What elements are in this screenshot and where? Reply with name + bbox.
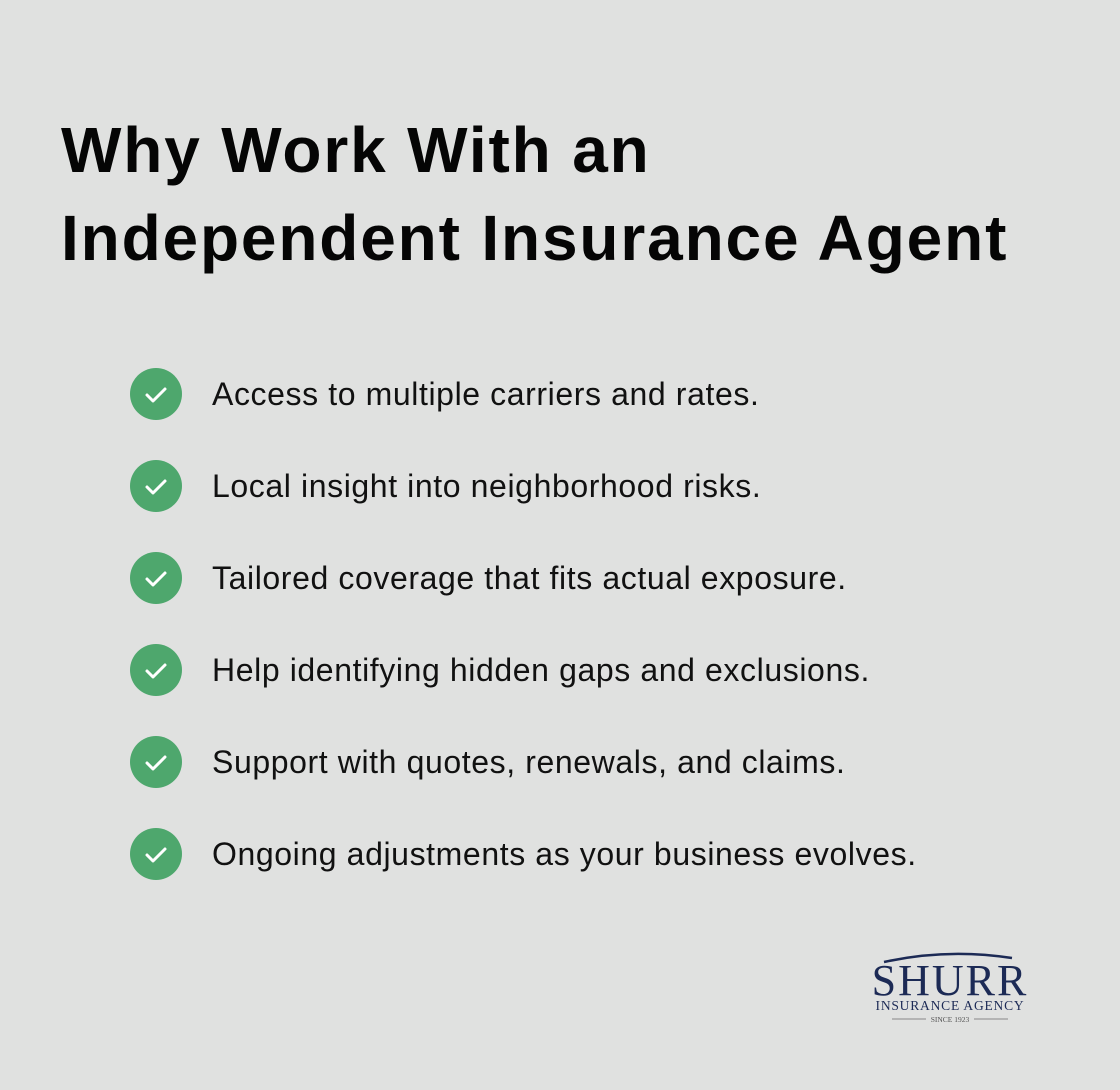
logo: SHURR bbox=[872, 956, 1028, 1005]
list item 1 bbox=[130, 368, 759, 420]
list item 5: Support with quotes, renewals, and claims. bbox=[212, 744, 846, 780]
list item 2 bbox=[130, 460, 761, 512]
list item 1: Access to multiple carriers and rates. bbox=[212, 376, 759, 412]
logo bbox=[872, 952, 1028, 1024]
list item 4: Help identifying hidden gaps and exclusions. bbox=[212, 652, 870, 688]
logo: INSURANCE AGENCY bbox=[876, 998, 1024, 1013]
list item 6 bbox=[130, 828, 917, 880]
list item 4 bbox=[130, 644, 870, 696]
title: Why Work With an bbox=[61, 114, 651, 186]
list item 2: Local insight into neighborhood risks. bbox=[212, 468, 761, 504]
list item 5 bbox=[130, 736, 846, 788]
title bbox=[61, 114, 1008, 274]
title: Independent Insurance Agent bbox=[61, 202, 1008, 274]
logo: SINCE 1923 bbox=[931, 1015, 970, 1024]
list item 3 bbox=[130, 552, 847, 604]
list item 6: Ongoing adjustments as your business evolves. bbox=[212, 836, 917, 872]
list item 3: Tailored coverage that fits actual exposure. bbox=[212, 560, 847, 596]
